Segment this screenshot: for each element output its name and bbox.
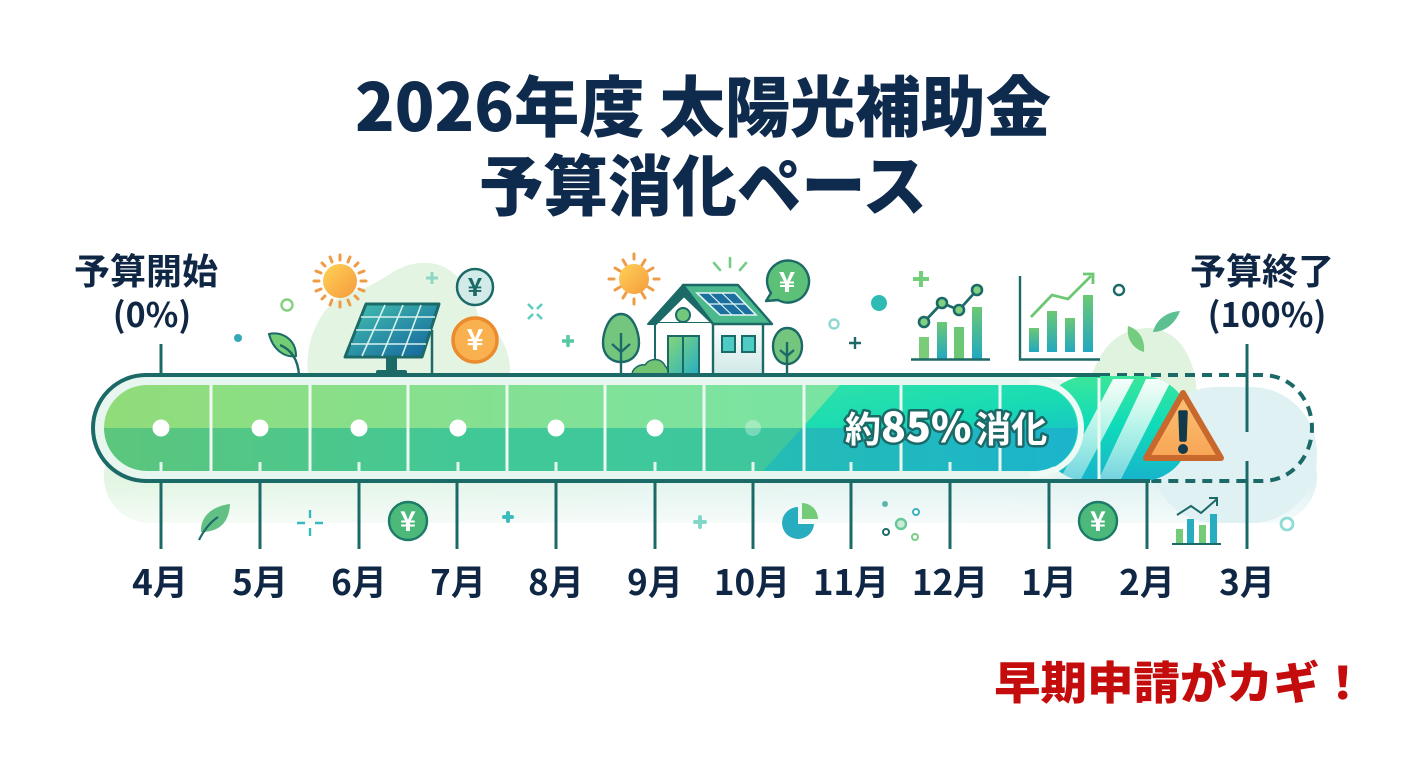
month labels: 8月 bbox=[528, 555, 584, 606]
icon: warning triangle bbox=[1146, 393, 1221, 458]
icon: yen coin right: ¥ bbox=[1090, 500, 1106, 539]
bar: pale ring bbox=[95, 377, 1095, 479]
chart: rising bars with line bbox=[911, 285, 990, 360]
icon: yen coins bbox=[453, 268, 497, 362]
bar: dividers bbox=[211, 378, 1099, 481]
month labels: 9月 bbox=[627, 555, 683, 606]
month labels: 3月 bbox=[1219, 555, 1275, 606]
icon: yen coin bottom bbox=[389, 500, 427, 540]
icon: small growth chart bbox=[1172, 498, 1221, 544]
month labels: 6月 bbox=[331, 555, 387, 606]
icon: sun over house bbox=[609, 254, 659, 304]
icon: yen speech bubble: ¥ bbox=[779, 261, 796, 301]
icon: leaf bottom bbox=[199, 504, 230, 540]
bar: remaining dashed track bbox=[1100, 375, 1312, 481]
icon: yen speech bubble bbox=[766, 261, 809, 303]
icon: sparkle bbox=[297, 510, 323, 536]
start label bbox=[74, 243, 218, 337]
start label: 予算開始 bbox=[74, 243, 218, 295]
icon: sprout bbox=[269, 333, 299, 375]
icon: ring bbox=[1281, 518, 1293, 530]
background wash bbox=[104, 263, 1317, 523]
icon: pie chart bbox=[782, 503, 818, 539]
month labels: 7月 bbox=[430, 555, 486, 606]
title: 2026年度 太陽光補助金 bbox=[355, 55, 1051, 151]
chart: bars with arrow bbox=[1020, 274, 1100, 360]
month labels: 1月 bbox=[1021, 555, 1077, 606]
month labels: 10月 bbox=[714, 555, 790, 606]
icon: sun over panel bbox=[314, 255, 366, 307]
end label: 予算終了 bbox=[1190, 243, 1334, 295]
timeline bar bbox=[93, 375, 1312, 481]
start label: (0%) bbox=[113, 288, 191, 337]
bar: white end ring bbox=[1030, 381, 1081, 475]
bar: outline bbox=[93, 375, 1150, 481]
icon: yen coins: ¥ bbox=[468, 268, 483, 304]
month labels: 12月 bbox=[912, 555, 988, 606]
progress label: 約85%消化 bbox=[845, 394, 1047, 454]
small decorations upper right bbox=[1114, 285, 1180, 352]
icon: trees bbox=[603, 314, 802, 375]
icon: yen coin bottom: ¥ bbox=[400, 500, 416, 539]
callout: 早期申請がカギ！ bbox=[994, 647, 1366, 712]
icon: dots cluster bbox=[882, 501, 919, 540]
month labels bbox=[132, 555, 1275, 606]
icon: yen coins: ¥ bbox=[466, 317, 484, 359]
bar: end fill bbox=[1054, 376, 1181, 480]
month labels: 11月 bbox=[813, 555, 889, 606]
icon: yen coin right bbox=[1079, 500, 1117, 540]
month labels: 4月 bbox=[132, 555, 188, 606]
end label: (100%) bbox=[1208, 288, 1326, 337]
month tick lines bbox=[161, 344, 1247, 549]
decorative plus marks bbox=[504, 513, 705, 527]
month labels: 2月 bbox=[1119, 555, 1175, 606]
month labels: 5月 bbox=[232, 555, 288, 606]
end label bbox=[1190, 243, 1334, 337]
icon: solar panel bbox=[345, 304, 439, 375]
small decorations upper left bbox=[234, 272, 574, 347]
bar: inner ticks bbox=[161, 462, 950, 471]
title bbox=[355, 55, 1051, 230]
bar: progress fill bbox=[104, 385, 1080, 471]
small decorations upper middle bbox=[830, 271, 929, 349]
bar: month dots bbox=[152, 420, 761, 436]
icon: house with solar roof bbox=[648, 258, 772, 375]
title: 予算消化ペース bbox=[479, 134, 927, 230]
